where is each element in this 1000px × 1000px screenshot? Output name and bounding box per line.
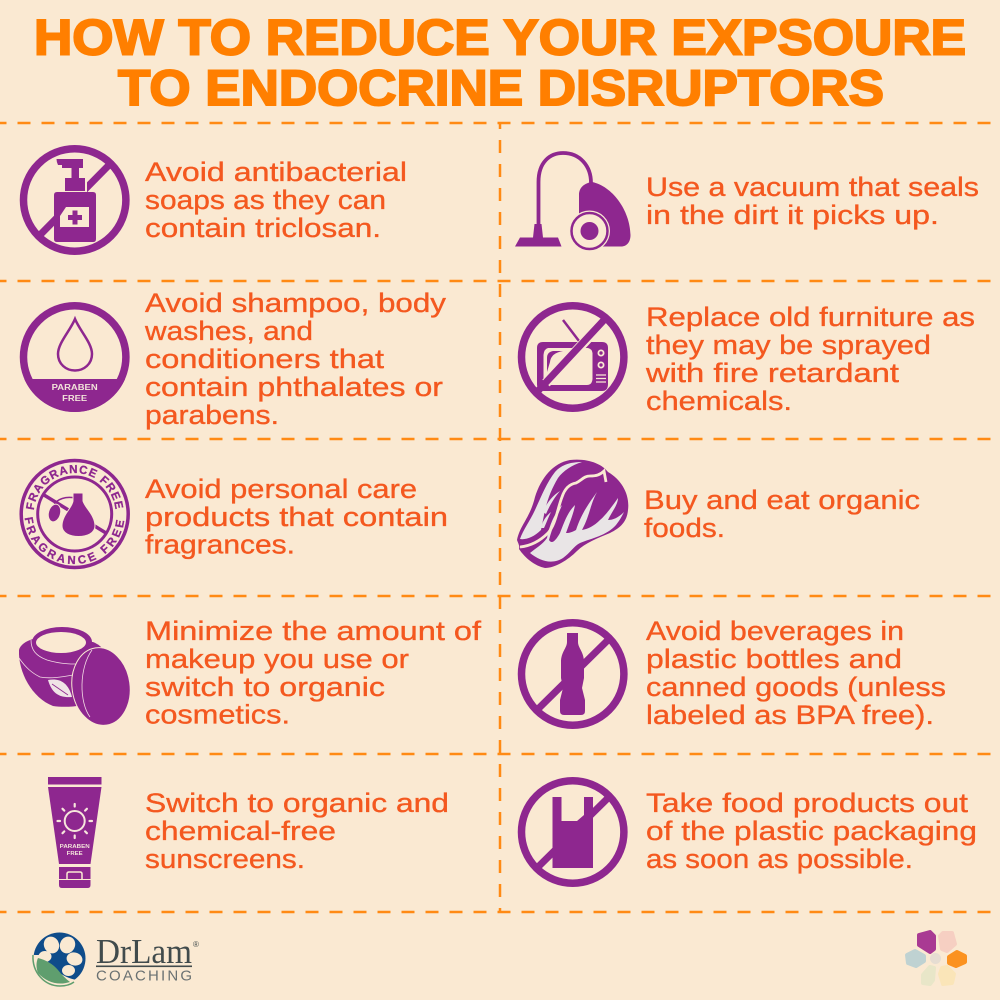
- text: antibacterial soaps: soaps as they can: [145, 185, 386, 215]
- text: organic foods: foods.: [644, 513, 725, 543]
- text: organic foods: [644, 485, 920, 543]
- text: makeup: cosmetics.: [145, 700, 290, 730]
- title: HOW TO REDUCE YOUR EXPSOURE: [34, 10, 966, 66]
- title: [34, 10, 966, 116]
- text: antibacterial soaps: contain triclosan.: [145, 213, 381, 243]
- icon: paraben free drop: FREE: [62, 394, 88, 403]
- text: plastic bottles: canned goods (unless: [646, 672, 946, 702]
- text: shampoo and body wash: conditioners that: [145, 344, 385, 374]
- icon: cosmetic jar with lid: [19, 627, 135, 729]
- text: old furniture: [645, 302, 975, 416]
- icon: paraben free drop: PARABEN: [52, 383, 98, 392]
- panel: makeup: [19, 616, 482, 730]
- text: personal care fragrances: [145, 474, 448, 560]
- text: personal care fragrances: fragrances.: [145, 530, 295, 560]
- icon: fragrance free stamp: [19, 458, 130, 570]
- icon: no plastic bag: [522, 781, 624, 883]
- text: plastic packaging: [646, 788, 977, 874]
- text: shampoo and body wash: Avoid shampoo, body: [145, 288, 447, 318]
- icon: lettuce: [517, 460, 628, 568]
- text: vacuum: [646, 172, 979, 230]
- text: makeup: switch to organic: [145, 672, 385, 702]
- text: antibacterial soaps: [145, 157, 407, 243]
- icon: vacuum cleaner: [515, 153, 630, 252]
- text: shampoo and body wash: contain phthalates or: [145, 372, 443, 402]
- text: personal care fragrances: Avoid personal care: [145, 474, 417, 504]
- text: sunscreen: [145, 788, 449, 874]
- text: plastic packaging: of the plastic packaging: [646, 816, 977, 846]
- text: shampoo and body wash: washes, and: [144, 316, 313, 346]
- text: vacuum: Use a vacuum that seals: [646, 172, 979, 202]
- panel: plastic bottles: [522, 616, 946, 730]
- panel: shampoo and body wash: [23, 288, 447, 430]
- text: vacuum: in the dirt it picks up.: [646, 200, 939, 230]
- text: old furniture: with fire retardant: [645, 358, 900, 388]
- panel: sunscreen: [48, 777, 449, 888]
- icon: no plastic bottle: [522, 623, 624, 725]
- icon: no television: [522, 306, 624, 408]
- icon: sunscreen tube: PARABEN: [60, 844, 90, 850]
- text: plastic bottles: plastic bottles and: [646, 644, 902, 674]
- text: DrLam wordmark: DrLam: [96, 932, 192, 971]
- icon: sunscreen tube: [48, 777, 102, 888]
- text: sunscreen: chemical-free: [145, 816, 336, 846]
- icon: no soap pump bottle: [23, 149, 126, 251]
- panel: personal care fragrances: [19, 458, 448, 570]
- panel: organic foods: [517, 460, 920, 568]
- logo: DrLam Coaching: [33, 932, 199, 986]
- text: plastic bottles: Avoid beverages in: [646, 616, 904, 646]
- text: DrLam wordmark: COACHING: [96, 968, 192, 984]
- title: TO ENDOCRINE DISRUPTORS: [118, 60, 884, 116]
- text: makeup: makeup you use or: [145, 644, 409, 674]
- panel: old furniture: [522, 302, 975, 416]
- text: sunscreen: Switch to organic and: [145, 788, 449, 818]
- text: plastic bottles: [646, 616, 946, 730]
- text: plastic packaging: as soon as possible.: [646, 844, 913, 874]
- panel: antibacterial soaps: [23, 149, 407, 251]
- text: DrLam wordmark: ®: [193, 940, 199, 949]
- text: old furniture: they may be sprayed: [646, 330, 931, 360]
- icon: paraben free drop: [23, 306, 126, 412]
- panel: plastic packaging: [522, 781, 977, 883]
- text: old furniture: Replace old furniture as: [646, 302, 975, 332]
- text: organic foods: Buy and eat organic: [644, 485, 920, 515]
- panel: vacuum: [515, 153, 979, 252]
- text: shampoo and body wash: parabens.: [145, 400, 279, 430]
- text: personal care fragrances: products that contain: [145, 502, 448, 532]
- icon: fragrance free stamp: FRAGRANCE FREE: [26, 464, 124, 510]
- text: shampoo and body wash: [144, 288, 447, 430]
- text: makeup: Minimize the amount of: [145, 616, 482, 646]
- text: plastic packaging: Take food products out: [646, 788, 969, 818]
- text: makeup: [145, 616, 482, 730]
- text: plastic bottles: labeled as BPA free).: [646, 700, 934, 730]
- icon: sunscreen tube: FREE: [67, 851, 83, 857]
- text: sunscreen: sunscreens.: [145, 844, 305, 874]
- text: antibacterial soaps: Avoid antibacterial: [145, 157, 407, 187]
- icon: colour flower: [907, 932, 965, 984]
- icon: fragrance free stamp: FRAGRANCE FREE: [24, 517, 124, 564]
- icon: DrLam flower emblem: [33, 932, 86, 986]
- text: old furniture: chemicals.: [646, 386, 792, 416]
